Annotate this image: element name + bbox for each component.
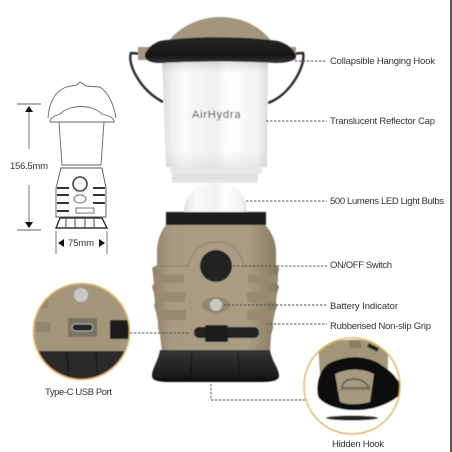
lantern bbox=[130, 17, 303, 382]
grip ribs bbox=[155, 275, 278, 320]
switch bbox=[200, 250, 232, 282]
leader lines bbox=[90, 61, 327, 400]
right edge line bbox=[450, 0, 452, 452]
label: hidden hook: Hidden Hook bbox=[332, 439, 384, 450]
label: reflector cap: Translucent Reflector Cap bbox=[330, 116, 435, 127]
handle bbox=[130, 53, 303, 103]
height label: 156.5mm bbox=[10, 161, 48, 172]
label: USB: Type-C USB Port bbox=[45, 387, 112, 398]
slot bbox=[194, 327, 259, 338]
label: switch: ON/OFF Switch bbox=[330, 260, 392, 271]
brand name: AirHydra bbox=[192, 109, 241, 121]
switch ridge bbox=[158, 242, 278, 266]
label: battery: Battery Indicator bbox=[330, 301, 398, 312]
dimension drawing bbox=[17, 82, 116, 254]
label: bulbs: 500 Lumens LED Light Bulbs bbox=[330, 196, 444, 207]
label: grip: Rubberised Non-slip Grip bbox=[330, 321, 431, 332]
black base bbox=[152, 350, 279, 382]
width label: 75mm bbox=[68, 238, 94, 249]
hidden hook inset bbox=[300, 335, 405, 437]
black band bbox=[166, 212, 266, 225]
outline lantern bbox=[48, 82, 116, 118]
dimension lines bbox=[17, 104, 107, 254]
battery indicator bbox=[202, 297, 230, 313]
USB inset bbox=[30, 280, 135, 383]
black cap rim bbox=[145, 37, 296, 63]
bulb bbox=[184, 183, 247, 214]
tan body bbox=[152, 225, 279, 352]
white reflector body bbox=[162, 60, 268, 167]
label: hook: Collapsible Hanging Hook bbox=[330, 56, 435, 67]
tan cap dome bbox=[168, 17, 272, 42]
collar bbox=[170, 167, 262, 183]
tan side lugs bbox=[138, 47, 296, 60]
dimension arrows bbox=[25, 106, 105, 247]
labels bbox=[45, 56, 444, 450]
